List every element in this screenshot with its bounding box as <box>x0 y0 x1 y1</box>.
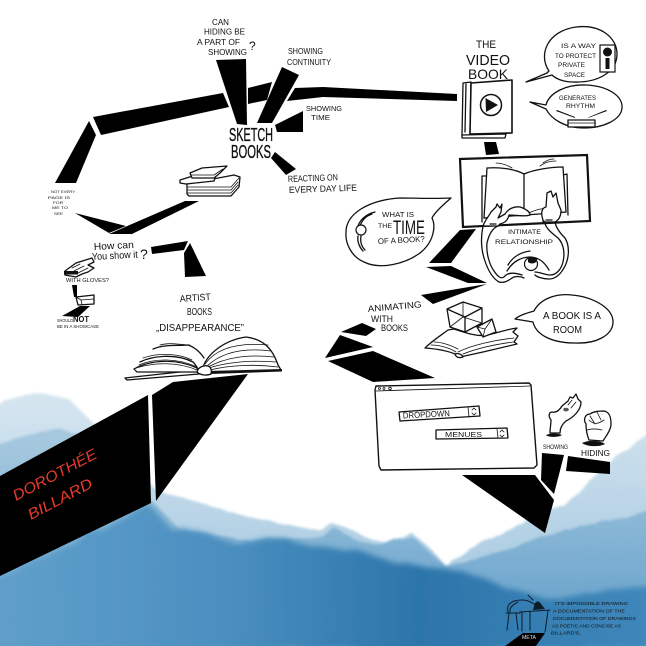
label: animating with books: ANIMATING <box>367 299 422 314</box>
icon: stacked books <box>180 166 240 196</box>
tiny note: not every page is for all to see <box>48 190 76 216</box>
menues control: MENUES <box>445 430 482 439</box>
window controls <box>378 387 391 390</box>
tiny note: not every page is for all to see: SEE <box>54 212 64 216</box>
label: reacting on every day life <box>288 172 357 195</box>
tiny note: not every page is for all to see: PAGE IS <box>48 196 71 200</box>
label: should not be in a showcase: SHOULD <box>57 318 74 323</box>
callout: generates rhythm <box>530 85 622 128</box>
icon: eye <box>507 251 549 271</box>
tiny note: not every page is for all to see: ME TO <box>52 206 68 210</box>
question: how can you show it: How can <box>94 240 134 253</box>
label: intimate relationship: RELATIONSHIP <box>495 239 554 246</box>
icon: hiding fist <box>582 411 611 446</box>
question: can hiding be a part of showing: SHOWING <box>208 47 247 57</box>
question: can hiding be a part of showing <box>197 17 256 57</box>
question: can hiding be a part of showing: HIDING BE <box>204 26 245 36</box>
icon: person slumped at desk <box>506 595 550 632</box>
dropdown control: DROPDOWN <box>403 408 450 420</box>
icon: open book <box>482 159 568 222</box>
icon: wristwatch <box>356 212 375 251</box>
note text <box>551 601 636 636</box>
note text: AS POETIC AND CONCISE AS <box>552 624 621 630</box>
label: animating with books <box>367 299 422 333</box>
question: can hiding be a part of showing: ? <box>249 39 256 53</box>
menues control <box>436 428 508 439</box>
heading: the video book: BOOK <box>468 66 509 82</box>
icon: flapping book <box>556 110 607 127</box>
icon: hand with glove <box>64 258 94 277</box>
callout: what is the time of a book <box>346 198 451 266</box>
left arm <box>482 226 524 282</box>
label: reacting on every day life: EVERY DAY LIFE <box>289 183 357 195</box>
panel: screen with open book and hands <box>460 155 590 282</box>
question: how can you show it: ? <box>140 246 148 262</box>
black connector bars <box>55 59 610 533</box>
question: how can you show it <box>92 240 148 263</box>
question: can hiding be a part of showing: CAN <box>212 17 229 27</box>
heading: sketch books <box>229 125 273 162</box>
note text: IT'S IMPOSSIBLE DRAWING <box>555 601 628 607</box>
label: artist books disappearance: ARTIST <box>179 292 211 305</box>
author name <box>10 445 101 524</box>
left hand <box>483 204 530 226</box>
question: how can you show it: You show it <box>92 250 138 263</box>
callout: what is the time of a book: WHAT IS <box>382 212 414 219</box>
note text: BILLARD'S. <box>551 630 581 636</box>
label: showing continuity <box>287 47 332 67</box>
right hand <box>542 191 561 222</box>
icon: keyhole <box>600 45 615 72</box>
callout: generates rhythm: GENERATES <box>559 95 597 102</box>
question: can hiding be a part of showing: A PART OF <box>197 37 240 47</box>
meta footer: artist at desk and note <box>505 595 636 646</box>
callout: protect private space: PRIVATE <box>558 62 586 69</box>
icon: open book with cubes <box>425 302 518 358</box>
author name: DOROTHÉE <box>10 445 101 505</box>
label: should not be in a showcase: BE IN A SHOWCASE <box>57 324 99 329</box>
label: artist books disappearance: BOOKS <box>187 307 212 318</box>
note text: DOCUMENTATION OF DRAWINGS <box>553 616 636 622</box>
label: showing time: TIME <box>311 113 330 122</box>
callout: a book is a room: ROOM <box>553 325 582 336</box>
name banner <box>0 374 248 576</box>
icon: video book <box>462 80 512 138</box>
label: showing continuity: CONTINUITY <box>287 58 332 67</box>
callout: protect private space: TO PROTECT <box>555 53 596 60</box>
panel: browser window <box>375 383 537 470</box>
heading: the video book: THE <box>476 39 496 51</box>
meta ramp: META <box>522 635 537 641</box>
label: should not be in a showcase <box>57 315 99 329</box>
tiny note: not every page is for all to see: NOT EVERY <box>51 190 76 194</box>
label: animating with books: WITH <box>371 314 393 324</box>
dropdown control <box>399 406 480 421</box>
icon: hands and arms <box>482 191 568 282</box>
callout: protect private space: SPACE <box>564 72 586 79</box>
callout: protect private space: IS A WAY <box>561 43 597 50</box>
label: showing continuity: SHOWING <box>288 47 323 56</box>
label: showing: SHOWING <box>543 444 568 451</box>
heading: sketch books: BOOKS <box>231 142 271 162</box>
watercolor mountains background <box>0 393 646 646</box>
callout: a book is a room: A BOOK IS A <box>543 311 601 322</box>
icon: open artist book <box>125 337 282 380</box>
label: with gloves: WITH GLOVES? <box>66 278 109 284</box>
icon: wireframe cubes <box>447 302 496 337</box>
label: showing time: SHOWING <box>306 104 342 113</box>
icon: showing hand <box>546 394 581 437</box>
label: intimate relationship <box>495 229 554 246</box>
tiny note: not every page is for all to see: FOR <box>53 201 64 205</box>
label: showing time <box>306 104 342 122</box>
label: reacting on every day life: REACTING ON <box>288 172 338 184</box>
right arm <box>535 221 564 275</box>
callout: what is the time of a book: THE <box>378 223 393 230</box>
note text: A DOCUMENTATION OF THE <box>553 608 625 614</box>
label: should not be in a showcase: NOT <box>73 315 89 324</box>
author name: BILLARD <box>25 475 96 524</box>
label: artist books disappearance <box>156 292 244 334</box>
label: hiding: HIDING <box>581 449 610 458</box>
label: intimate relationship: INTIMATE <box>508 229 541 236</box>
heading: the video book: VIDEO <box>466 52 510 69</box>
heading: the video book <box>466 39 510 82</box>
callout: a book is a room <box>515 295 613 343</box>
label: animating with books: BOOKS <box>381 323 408 333</box>
callout: protect private space <box>526 27 617 82</box>
callout: what is the time of a book: OF A BOOK? <box>378 235 426 246</box>
heading: sketch books: SKETCH <box>229 125 273 145</box>
callout: generates rhythm: RHYTHM <box>566 103 595 110</box>
icon: showcase box <box>76 295 94 305</box>
label: artist books disappearance: „DISAPPEARANCE” <box>156 323 244 334</box>
callout: what is the time of a book: TIME <box>393 218 425 239</box>
